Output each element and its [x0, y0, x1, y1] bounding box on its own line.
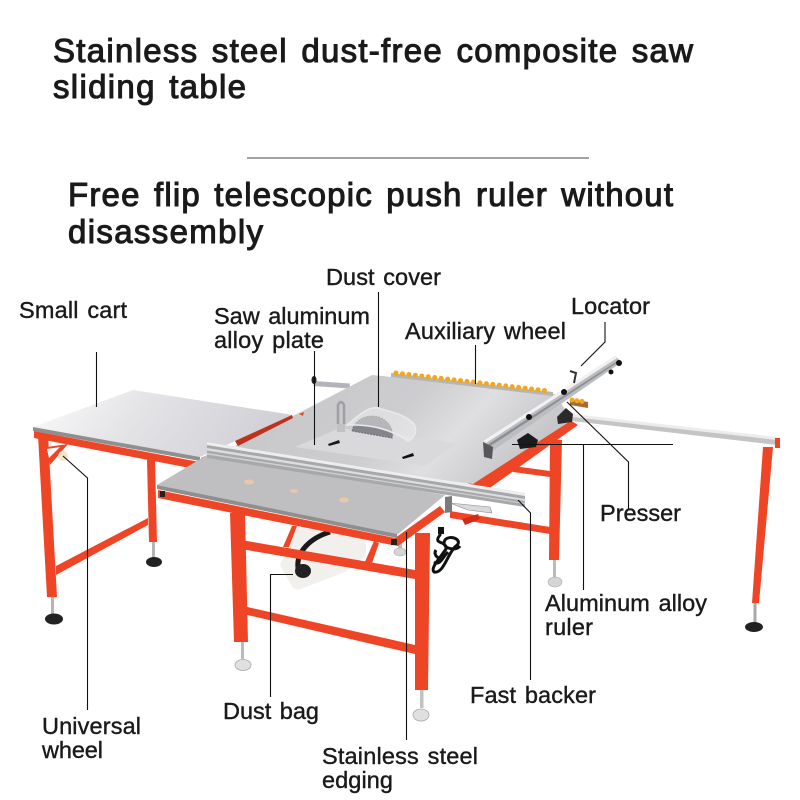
front sliding table	[157, 455, 460, 721]
rear bar	[314, 381, 350, 388]
dust bag	[280, 528, 366, 590]
main table	[201, 375, 578, 497]
right push ruler	[483, 356, 622, 459]
label: dust bag: Dust bag	[223, 698, 319, 724]
label: aluminum alloy ruler	[545, 590, 707, 640]
label: dust cover: Dust cover	[326, 264, 441, 290]
transparent dust cover	[347, 408, 416, 441]
label: small cart: Small cart	[19, 297, 127, 323]
title: sliding table	[53, 68, 246, 105]
label: locator: Locator	[571, 293, 650, 319]
subtitle: Free flip telescopic push ruler without	[68, 176, 673, 213]
subtitle	[68, 176, 673, 250]
back table legs and right extension	[394, 414, 780, 632]
label: stainless steel edging: Stainless steel	[322, 743, 478, 769]
left cart table	[33, 390, 293, 624]
title	[53, 32, 693, 105]
label: saw aluminum alloy plate	[214, 303, 370, 353]
leader lines	[63, 292, 673, 740]
label: stainless steel edging	[322, 743, 478, 793]
label: saw aluminum alloy plate: alloy plate	[214, 327, 324, 353]
label: saw aluminum alloy plate: Saw aluminum	[214, 303, 370, 329]
label: universal wheel: Universal	[42, 713, 141, 739]
label: auxiliary wheel: Auxiliary wheel	[405, 318, 566, 344]
title: Stainless steel dust-free composite saw	[53, 32, 693, 69]
label: presser: Presser	[600, 500, 681, 526]
label: universal wheel: wheel	[41, 737, 103, 763]
subtitle: disassembly	[68, 213, 264, 250]
power cord	[433, 527, 460, 572]
label: fast backer: Fast backer	[470, 682, 596, 708]
label: aluminum alloy ruler: ruler	[545, 614, 593, 640]
saw plate, blade and dust cover	[295, 402, 457, 466]
label: stainless steel edging: edging	[322, 767, 393, 793]
label: aluminum alloy ruler: Aluminum alloy	[545, 590, 707, 616]
sliding table saw illustration	[33, 356, 780, 721]
auxiliary wheel row	[391, 373, 588, 408]
label: universal wheel	[41, 713, 141, 763]
front fence rail	[207, 442, 525, 513]
